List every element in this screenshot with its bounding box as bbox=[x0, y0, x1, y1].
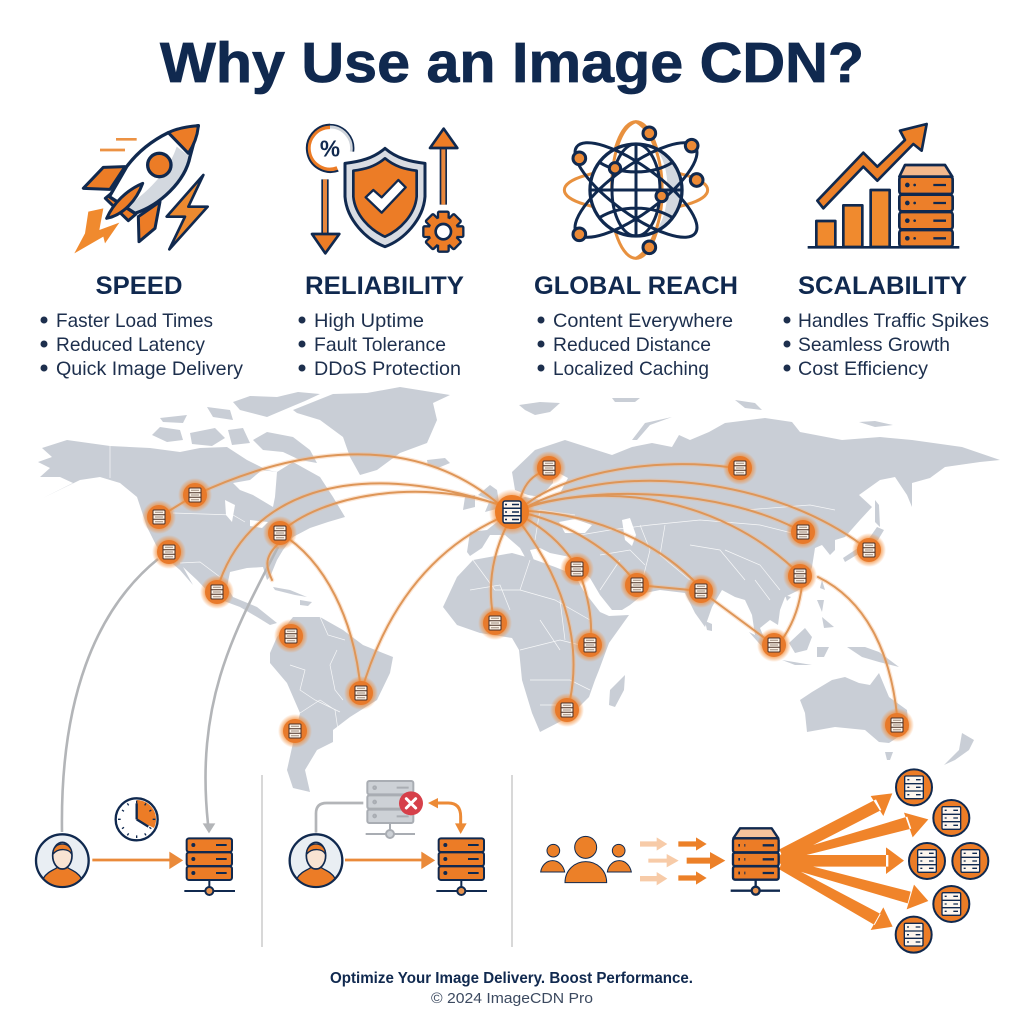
icon: offline server bbox=[366, 781, 415, 838]
heading: scalability: SCALABILITY bbox=[798, 272, 967, 300]
water: inland seas bbox=[225, 500, 636, 546]
icon: globe with orbits bbox=[563, 122, 709, 258]
icon: user bbox=[290, 834, 342, 887]
list: speed benefits bbox=[40, 310, 243, 380]
country borders bbox=[110, 446, 835, 730]
grey routes to bottom panels bbox=[62, 547, 278, 832]
icon: rocket bbox=[74, 126, 208, 253]
list: reliability benefits: Fault Tolerance bbox=[314, 334, 446, 356]
edge server nodes bbox=[896, 769, 988, 953]
water: hudson bay bbox=[233, 470, 277, 507]
continent: africa bbox=[443, 553, 629, 732]
list: reliability benefits bbox=[298, 310, 461, 380]
list: speed benefits: Quick Image Delivery bbox=[56, 358, 243, 380]
list: scalability benefits: Cost Efficiency bbox=[798, 358, 928, 380]
icon: central server bbox=[731, 828, 780, 895]
icon: reliability shield: % bbox=[320, 136, 340, 162]
hub server bbox=[489, 489, 535, 535]
grey link bbox=[316, 803, 363, 833]
continent: north america bbox=[38, 440, 345, 625]
panel: latency bbox=[36, 798, 235, 895]
icon: user bbox=[36, 834, 89, 887]
arrow: user to backup server bbox=[345, 854, 433, 867]
divider left bbox=[261, 775, 263, 947]
world map bbox=[38, 387, 1000, 792]
list: scalability benefits: Seamless Growth bbox=[798, 334, 950, 356]
list: global reach benefits: Content Everywhere bbox=[553, 310, 733, 332]
arrows: incoming traffic bbox=[640, 837, 725, 885]
panel: scaling bbox=[541, 769, 988, 953]
list: scalability benefits: Handles Traffic Spikes bbox=[798, 310, 989, 332]
footer tagline: Optimize Your Image Delivery. Boost Performance. bbox=[330, 970, 693, 987]
list: scalability benefits bbox=[784, 310, 989, 380]
network arcs bbox=[159, 454, 897, 715]
server nodes bbox=[142, 451, 914, 748]
footer copyright: © 2024 ImageCDN Pro bbox=[431, 990, 593, 1007]
icon: error badge bbox=[399, 791, 423, 815]
heading: speed: SPEED bbox=[96, 272, 182, 300]
list: reliability benefits: DDoS Protection bbox=[314, 358, 461, 380]
arrow: reroute bbox=[428, 798, 467, 834]
list: speed benefits: Reduced Latency bbox=[56, 334, 205, 356]
icon: clock bbox=[116, 798, 158, 840]
heading: global reach: GLOBAL REACH bbox=[534, 272, 738, 300]
icon: reliability shield bbox=[307, 125, 463, 253]
title: Why Use an Image CDN? bbox=[160, 31, 864, 95]
panel: failover bbox=[290, 781, 487, 895]
list: speed benefits: Faster Load Times bbox=[56, 310, 213, 332]
icon: server bbox=[436, 838, 487, 895]
list: global reach benefits bbox=[538, 310, 733, 380]
heading: reliability: RELIABILITY bbox=[305, 272, 464, 300]
icon: server bbox=[184, 838, 235, 895]
divider right bbox=[511, 775, 513, 947]
arctic islands and greenland bbox=[152, 387, 450, 606]
icon: users bbox=[541, 836, 631, 883]
icon: scalability chart and server bbox=[808, 124, 959, 247]
grey arrow head bbox=[203, 823, 215, 833]
list: global reach benefits: Reduced Distance bbox=[553, 334, 711, 356]
islands: asia, pacific and oceania bbox=[463, 398, 974, 765]
list: global reach benefits: Localized Caching bbox=[553, 358, 709, 380]
list: reliability benefits: High Uptime bbox=[314, 310, 424, 332]
arrow: user to server bbox=[92, 854, 181, 867]
continent: eurasia bbox=[467, 418, 1000, 640]
arrows: fan-out bbox=[779, 793, 928, 930]
continent: south america bbox=[270, 617, 393, 792]
